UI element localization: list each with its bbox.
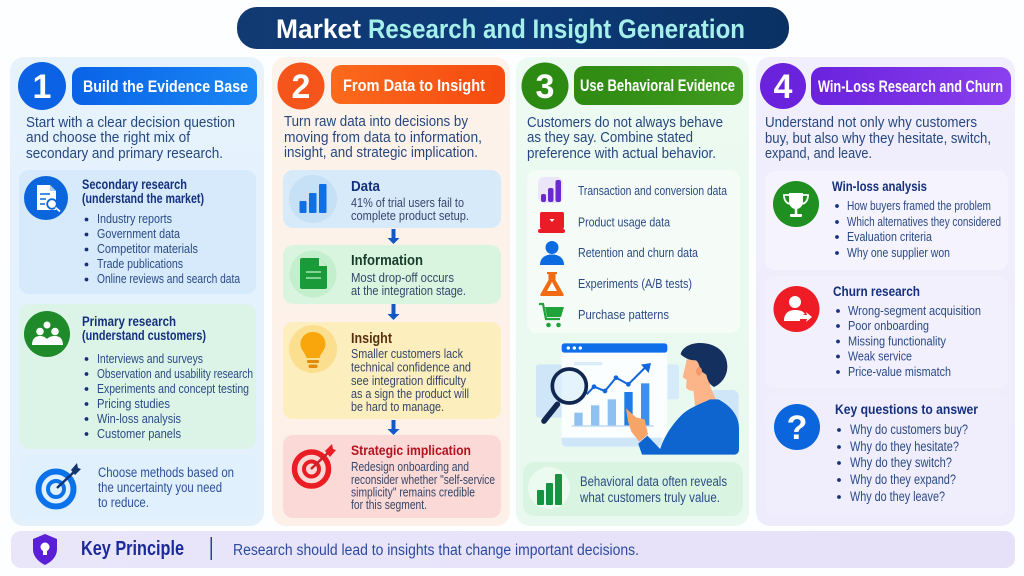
list: win-loss questions: Evaluation criteria [847,230,932,244]
icon: red target [294,444,336,486]
intro text: Start with a clear decision question [26,115,235,131]
list: win-loss questions: How buyers framed the problem [847,199,991,213]
data text: 41% of trial users fail to [351,196,464,210]
strategic implication text: for this segment. [351,498,427,512]
number badge 1: 1 [33,68,51,106]
list: primary methods: Interviews and surveys [97,352,203,366]
intro text: expand, and leave. [765,146,872,162]
heading: build the evidence base [72,67,257,105]
card: key questions [765,394,1008,516]
arrow: data to information [388,229,400,244]
number badge 1 [18,62,66,110]
callout text: to reduce. [98,495,149,510]
callout: choose methods [19,455,256,518]
intro text [527,115,723,162]
panel: 1 build the evidence base [10,57,264,526]
icon: green bars [528,467,570,509]
title banner: Research and Insight Generation [368,14,745,44]
number badge 2: 2 [292,68,310,106]
information text: Most drop-off occurs [351,271,454,285]
strategic implication text: reconsider whether "self-service [351,473,495,487]
list: primary methods: Experiments and concept testing [97,382,249,396]
icon: green cart [539,304,564,327]
data text: complete product setup. [351,209,469,223]
title banner: Market [276,14,361,44]
strategic implication text: Redesign onboarding and [351,460,469,474]
icon: trophy [773,181,819,227]
subheading: secondary research [82,177,204,206]
strategic implication text [351,442,495,512]
item: experiments: Experiments (A/B tests) [578,277,692,291]
icon: bar chart [289,175,337,223]
card: churn research [765,276,1008,388]
intro text [765,115,991,162]
list: primary methods: Customer panels [97,427,181,441]
information text: at the integration stage. [351,284,466,298]
list: primary methods: Observation and usability research [97,367,253,381]
list: churn causes [836,304,981,379]
card: win-loss analysis [765,171,1008,270]
list: secondary sources: Government data [97,227,180,241]
data text: Data [351,179,381,195]
intro text: moving from data to information, [284,130,482,146]
number badge 4: 4 [774,68,793,106]
panel: 3 use behavioral evidence [516,57,749,526]
intro text: buy, but also why they hesitate, switch, [765,131,991,147]
list: secondary sources [85,212,240,286]
icon: people group [24,311,70,357]
list: secondary sources: Trade publications [97,257,183,271]
insight text: Smaller customers lack [351,347,464,361]
icon: shield with bulb [33,534,57,565]
key principle banner [11,531,1015,568]
intro text: Understand not only why customers [765,115,977,131]
list: win-loss questions [835,199,1001,260]
list: primary methods [85,352,253,441]
heading: use behavioral evidence [574,66,743,105]
title banner [237,7,789,49]
icon: red laptop [538,212,565,233]
panel: 4 win-loss research and churn [756,57,1015,526]
intro text: preference with actual behavior. [527,146,716,162]
list: primary methods: Pricing studies [97,397,170,411]
card: information [283,245,501,304]
callout text [579,474,727,505]
callout text: what customers truly value. [579,490,720,505]
icon: person leaving [774,286,820,332]
subheading: win-loss analysis: Win-loss analysis [832,179,927,194]
icon: light bulb [289,325,337,373]
item: transaction and conversion data: Transaction and conversion data [578,184,727,198]
list: key questions: Why do they leave? [850,489,945,504]
insight text: Insight [351,331,392,347]
insight text: technical confidence and [351,360,471,374]
list: key questions: Why do customers buy? [850,422,968,437]
intro text: insight, and strategic implication. [284,145,478,161]
icon: purple bars [538,177,563,203]
card: behavioral data sources [527,170,740,333]
insight text: as a sign the product will [351,387,469,401]
list: churn causes: Weak service [848,350,912,364]
subheading: primary research: (understand customers) [82,328,206,343]
intro text: secondary and primary research. [26,146,223,162]
heading: use behavioral evidence: Use Behavioral Evidence [580,76,735,95]
key principle statement: Research should lead to insights that change important decisions. [233,542,639,559]
icon: question mark: ? [787,409,807,447]
list: key questions [837,422,968,504]
data text [351,179,469,223]
list: churn causes: Poor onboarding [848,319,929,333]
icon: blue person [540,241,564,265]
icon: document [290,250,336,298]
card: insight [283,322,501,419]
heading: build the evidence base: Build the Evidence Base [83,77,248,96]
item: retention and churn data: Retention and churn data [578,246,698,260]
information text [351,253,466,298]
list: primary methods: Win-loss analysis [97,412,181,426]
item: purchase patterns: Purchase patterns [578,308,669,322]
key principle label: Key Principle [81,538,184,560]
insight text [351,331,471,414]
icon: orange flask [540,272,564,296]
card: strategic implication [283,435,501,518]
number badge 2 [278,62,324,110]
number badge 4 [760,63,806,109]
intro text [26,115,235,162]
subheading: key questions to answer: Key questions to answer [835,402,979,417]
insight text: see integration difficulty [351,374,467,388]
intro text: Customers do not always behave [527,115,723,131]
subheading: primary research [82,314,206,343]
list: key questions: Why do they switch? [850,455,952,470]
item: product usage data: Product usage data [578,216,670,230]
intro text: and choose the right mix of [26,130,191,146]
card: primary research [19,304,256,449]
icon: question mark [774,404,820,450]
strategic implication text: simplicity" remains credible [351,486,475,500]
callout text: Choose methods based on [98,465,234,480]
subheading: secondary research: (understand the market) [82,191,204,206]
card: data [283,170,501,228]
list: churn causes: Price-value mismatch [848,365,951,379]
list: churn causes: Missing functionality [848,334,947,348]
list: secondary sources: Online reviews and search data [97,272,240,286]
list: win-loss questions: Why one supplier won [847,246,950,260]
panel: 2 from data to insight [272,57,510,526]
arrow: insight to strategic implication [388,420,400,435]
strategic implication text: Strategic implication [351,442,471,458]
card: secondary research [19,170,256,294]
heading: win-loss research and churn [811,67,1011,105]
callout text: Behavioral data often reveals [580,474,727,489]
list: key questions: Why do they expand? [850,472,956,487]
subheading: churn research: Churn research [833,284,920,299]
subheading: primary research: Primary research [82,314,176,329]
callout text: the uncertainty you need [98,480,222,495]
information text: Information [351,253,423,269]
list: churn causes: Wrong-segment acquisition [848,304,981,318]
icon: target [38,463,81,506]
arrow: information to insight [388,304,400,320]
heading: from data to insight: From Data to Insight [343,76,485,95]
insight text: be hard to manage. [351,400,444,414]
icon: document search [24,176,68,220]
intro text: Turn raw data into decisions by [284,114,469,130]
subheading: secondary research: Secondary research [82,177,187,192]
callout: behavioral data reveals value [523,462,743,516]
list: key questions: Why do they hesitate? [850,439,959,454]
heading: from data to insight [331,65,505,104]
number badge 3 [522,62,568,110]
intro text: as they say. Combine stated [527,130,693,146]
callout text [98,465,234,510]
list: secondary sources: Competitor materials [97,242,198,256]
illustration: analyst at chart dashboard [536,343,739,455]
number badge 3: 3 [536,68,554,106]
intro text [284,114,482,161]
list: secondary sources: Industry reports [97,212,172,226]
